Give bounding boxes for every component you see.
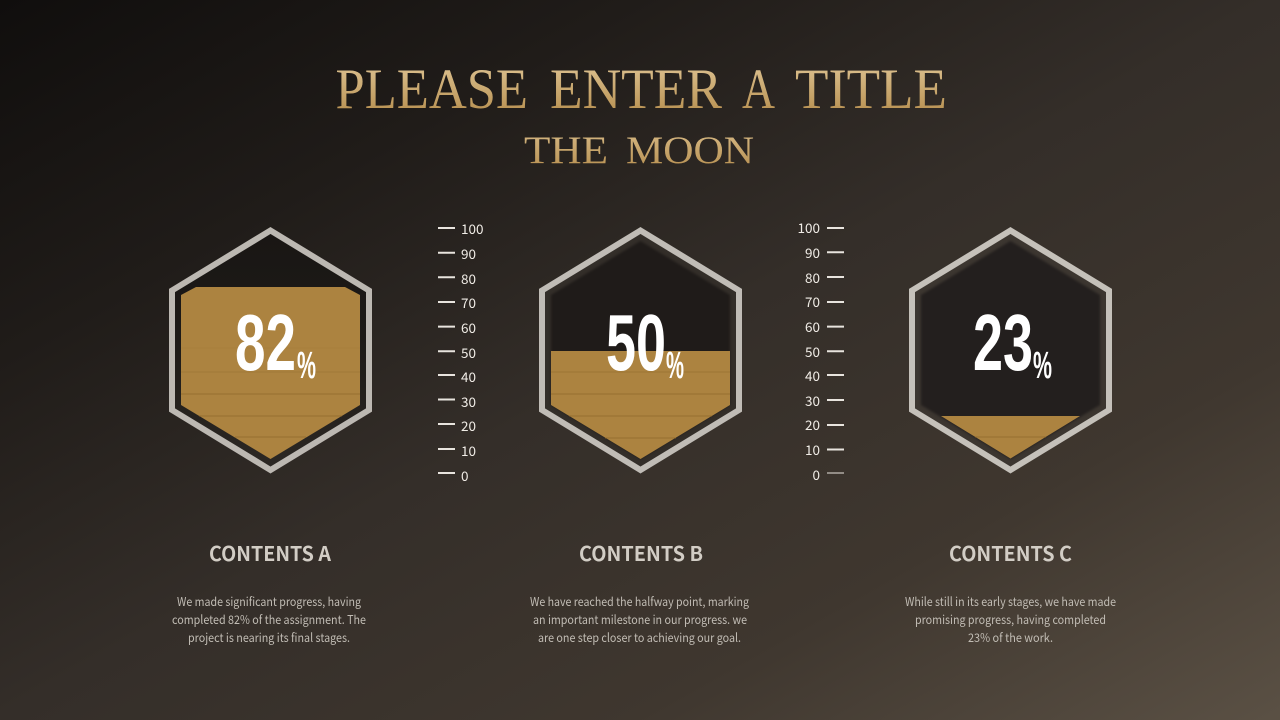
scale: left: 50 [461, 342, 476, 362]
panel: contents C [905, 230, 1116, 646]
scale: left: 30 [461, 391, 476, 411]
scale: right: 60 [805, 316, 820, 336]
hexagon gauge B: 50% [542, 230, 739, 470]
hexagon gauge C: 23% [912, 230, 1109, 470]
heading A: CONTENTS A [209, 538, 331, 567]
scale: right: 90 [805, 242, 820, 262]
description A [172, 593, 366, 646]
description C: While still in its early stages, we have made [905, 593, 1116, 610]
hexagon gauge A: 82% [172, 230, 369, 470]
description B: are one step closer to achieving our goal. [538, 629, 741, 646]
hexagon gauge B: 50%: % [666, 345, 684, 387]
description C [905, 593, 1116, 646]
scale: right: 40 [805, 365, 820, 385]
description B: an important milestone in our progress. we [533, 611, 747, 628]
scale: right: 10 [805, 439, 820, 459]
scale: right [798, 217, 844, 484]
panel: contents A [172, 230, 369, 646]
description C: promising progress, having completed [915, 611, 1106, 628]
scale: right: 30 [805, 390, 820, 410]
hexagon gauge B: 50%: 50 [606, 298, 666, 387]
subtitle: THE [524, 129, 608, 172]
scale: left: 70 [461, 292, 476, 312]
scale: left: 0 [461, 465, 468, 485]
description A: project is nearing its final stages. [188, 629, 350, 646]
scale: left: 90 [461, 243, 476, 263]
subtitle [524, 129, 754, 172]
scale: left [438, 218, 483, 485]
scale: left: 20 [461, 415, 476, 435]
title [336, 58, 947, 121]
scale: left: 80 [461, 268, 476, 288]
panel: contents B [530, 230, 749, 646]
scale: left: 10 [461, 440, 476, 460]
description B: We have reached the halfway point, marking [530, 593, 749, 610]
title: TITLE [795, 58, 947, 121]
description A: completed 82% of the assignment. The [172, 611, 366, 628]
scale: right: 50 [805, 341, 820, 361]
title: PLEASE [336, 58, 528, 121]
title: A [742, 58, 775, 121]
hexagon gauge C: 23%: % [1033, 345, 1052, 387]
hexagon gauge A: 82%: 82 [235, 298, 296, 387]
scale: right: 20 [805, 414, 820, 434]
hexagon gauge A: 82%: % [297, 345, 316, 387]
description B [530, 593, 749, 646]
description A: We made significant progress, having [177, 593, 361, 610]
scale: left: 100 [461, 218, 483, 238]
scale: left: 40 [461, 366, 476, 386]
scale: right: 0 [812, 464, 820, 484]
title: ENTER [550, 58, 722, 121]
scale: right: 100 [798, 217, 820, 237]
scale: right: 70 [805, 291, 820, 311]
scale: left: 60 [461, 317, 476, 337]
description C: 23% of the work. [968, 629, 1053, 646]
hexagon gauge C: 23%: 23 [973, 298, 1033, 387]
heading B: CONTENTS B [579, 538, 703, 567]
scale: right: 80 [805, 267, 820, 287]
heading C: CONTENTS C [949, 538, 1072, 567]
subtitle: MOON [626, 129, 754, 172]
